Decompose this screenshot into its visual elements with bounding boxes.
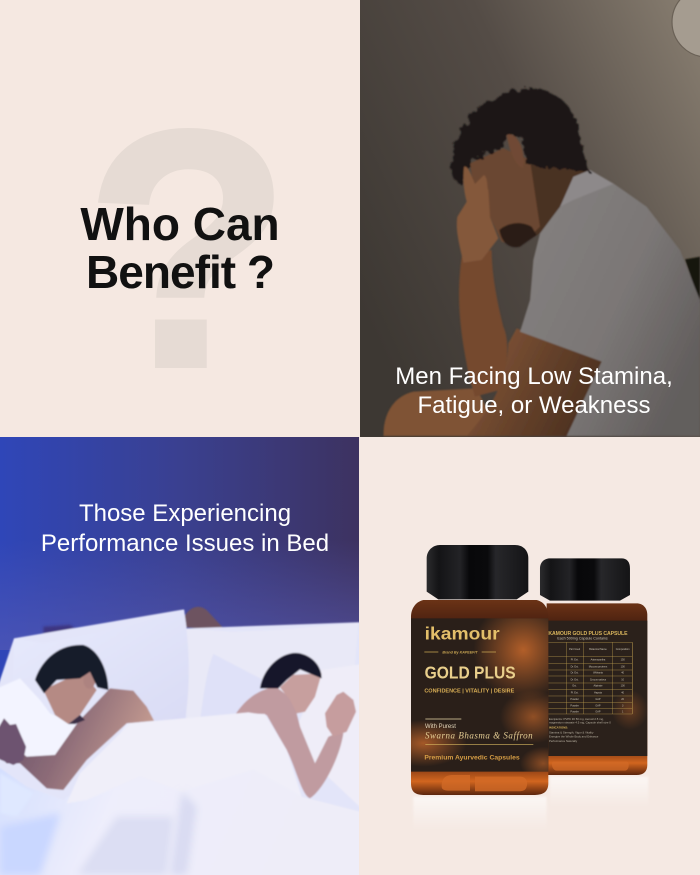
woman hand [325,692,356,737]
back bottle cap [540,558,630,601]
back bottle: Performance Naturally [549,739,578,743]
blanket [0,713,367,875]
shirt [520,170,700,436]
premium text: Premium Ayurvedic Capsules [424,755,520,762]
heading [80,198,280,298]
back bottle: Pl. Ext. [571,659,579,662]
caption: low stamina [395,363,673,419]
back bottle label [547,621,647,756]
back label text [548,631,628,641]
back bottle: Part Used [569,648,581,651]
back bottle: 40 [621,672,625,675]
man hair [35,645,108,693]
brand line [424,650,496,654]
caption: low stamina: Fatigue, or Weakness [417,392,651,419]
back bottle: Hapsia [594,691,602,694]
caption: performance issues: Those Experiencing [79,500,291,527]
back label table [548,642,632,714]
back bottle: Stamina & Strength, Vigor & Vitality [549,730,594,734]
back bottle: GAP [595,710,601,713]
back bottle: 100 [621,665,625,668]
woman body [235,687,343,798]
back bottle: 150 [621,659,625,662]
neck [520,163,590,243]
product bottles [411,545,648,813]
back bottle: 1 [622,710,624,713]
left pillow [158,629,188,720]
ingredient text: With Purest [425,724,456,730]
panel: who can benefit [0,0,360,438]
face [470,148,540,247]
back bottle: Energize the Whole Body and Enhance [549,734,599,738]
back bottle: Powder [570,698,579,701]
decorative question mark: ? [85,60,291,438]
back bottle: Dr. Ext. [571,665,579,668]
woman face [280,673,322,713]
back bottle: Powder [570,710,579,713]
back bottle: Crocus sativus [590,678,607,681]
back bottle: Alpinate [593,685,603,688]
woman hair [260,653,322,688]
back bottle: Dr. Ext. [571,678,579,681]
back bottle capsules [552,762,629,771]
back bottle: 10 [621,678,625,681]
heading: Who Can [80,198,280,250]
caption: performance issues [42,504,328,551]
back bottle: Composition [616,648,630,651]
back bottle: 40 [621,691,625,694]
hair [452,89,590,185]
back bottle: Asteracantha [591,659,606,662]
back bottle body [547,603,647,775]
back bottle: Excipients: PVPK 30 50 mg, Aerosil 2.5 mg, [549,717,604,721]
brand line: Brand By KAPEEFIT [442,650,478,654]
bottle reflection [413,797,547,830]
panel: product [411,545,648,817]
front bottle [411,545,548,795]
back bottle: Powder [570,704,579,707]
pillow under woman [300,665,359,805]
back bottle: GAP [595,704,601,707]
capsules [442,775,527,791]
back bottle: INDICATIONS: [549,726,568,730]
back bottle: 3 [622,704,624,707]
back bottle: 20 [621,698,625,701]
front bottle body [411,600,548,795]
back bottle: Pl. Ext. [571,691,579,694]
back bottle: Botanical Name [589,648,607,651]
product name: GOLD PLUS [425,662,516,682]
hand [457,166,498,263]
leg [383,388,500,436]
back label text: KAMOUR GOLD PLUS CAPSULE [548,631,628,637]
caption: performance issues: Performance Issues in Bed [41,530,329,557]
back bottle: 100 [621,685,625,688]
heading: Benefit ? [86,246,275,298]
photo: man holding his head [383,89,700,436]
icon: wall clock [672,0,700,57]
caption: low stamina: Men Facing Low Stamina, [395,363,673,390]
bed base [0,609,359,812]
photo: couple lying back to back [0,607,367,875]
forearm [459,250,507,397]
back bottle: GAP [595,698,601,701]
man hand [0,718,26,765]
back pillows [182,623,358,721]
back bottle: Dr. Ext. [571,672,579,675]
ingredient text: Swarna Bhasma & Saffron [425,731,533,741]
upper arm [467,328,603,436]
ingredient text [425,724,533,741]
back bottle: Withania [593,672,603,675]
ear [506,133,524,158]
brand logo: ikamour [425,623,500,643]
pillow under man [0,678,80,757]
tagline: CONFIDENCE | VITALITY | DESIRE [424,689,515,695]
right pillow [202,656,262,716]
panel: man with low stamina [360,0,700,437]
front bottle cap [427,545,528,599]
front bottle label [411,618,548,772]
back bottle: Mucuna pruriens [589,665,608,668]
back bottle [540,558,648,775]
back bottle: Ext. [573,685,577,688]
man body [0,688,154,790]
man face [43,672,97,724]
man ear [83,671,95,689]
back bottle: magnesium stearate 4.5 mg, Capsule shell size 0 [549,721,611,725]
panel: couple in bed [0,437,367,875]
back label text: Each 500mg Capsule Contains [557,637,608,641]
